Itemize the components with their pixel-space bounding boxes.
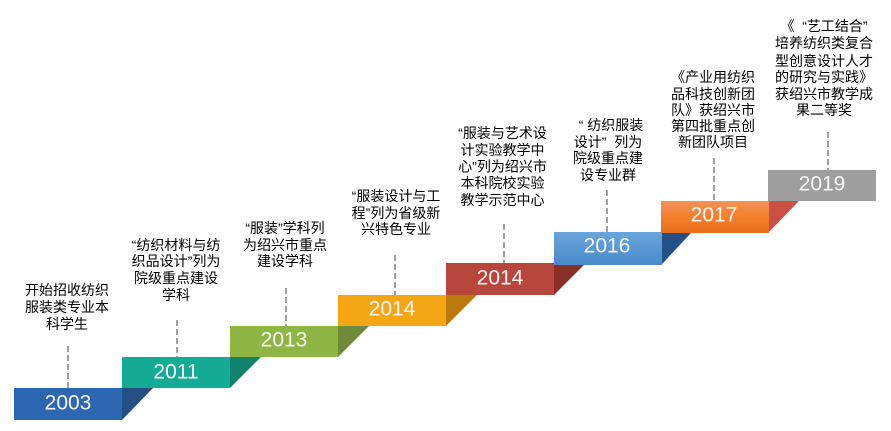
2003 connector: [67, 346, 69, 388]
2014 red description: 计实验教学中: [460, 142, 544, 158]
2013 bar: [230, 326, 338, 357]
2016 year: 2016: [584, 234, 630, 258]
2016 description: “ 纺织服装: [579, 117, 643, 133]
2011 description: 织品设计”列为: [132, 253, 220, 269]
2017 connector: [713, 158, 715, 201]
step: 2014 red: [446, 125, 585, 295]
2011 bar: [122, 357, 230, 388]
step: 2013: [230, 220, 369, 357]
2017 description: 新团队项目: [678, 134, 748, 150]
2013 fold: [338, 326, 369, 357]
2016 bar: [554, 232, 662, 265]
2014 orange year: 2014: [369, 298, 416, 320]
2013 connector: [285, 288, 287, 326]
2016 fold: [662, 233, 691, 264]
2011 description: “纺织材料与纺: [132, 237, 220, 253]
2011 connector: [176, 320, 178, 357]
2003 description: 科学生: [46, 316, 88, 332]
2014 red description: “服装与艺术设: [458, 125, 547, 141]
2016 description: 设计” 列为: [574, 134, 642, 150]
2014 orange connector: [394, 255, 396, 295]
2014 orange bar: [338, 295, 446, 326]
2013 description: “服装”学科列: [245, 220, 325, 236]
2019 description: 获绍兴市教学成: [775, 86, 873, 102]
2019 description: 果二等奖: [796, 102, 852, 118]
2019 year: 2019: [799, 172, 845, 196]
2017 description: 品科技创新团: [671, 86, 755, 102]
2019 connector: [827, 132, 829, 170]
2003 bar: [14, 388, 122, 420]
2017 description: 《产业用纺织: [671, 69, 755, 85]
2019 description: 《 “艺工结合”: [780, 18, 868, 34]
2014 red description: 本科院校实验: [460, 175, 544, 191]
2013 description: 建设学科: [257, 253, 313, 269]
2016 description: 设专业群: [580, 167, 636, 183]
step: 2016: [554, 117, 691, 265]
2017 description: 第四批重点创: [671, 118, 755, 134]
step: 2017: [661, 69, 799, 233]
2017 fold: [769, 201, 799, 232]
2011 fold: [230, 357, 261, 388]
2014 red fold: [554, 264, 585, 295]
2014 red connector: [503, 224, 505, 263]
step: 2011: [122, 237, 261, 388]
step: 2003: [14, 282, 153, 420]
2016 connector: [606, 190, 608, 232]
2013 year: 2013: [261, 328, 307, 352]
2003 description: 服装类专业本: [25, 299, 109, 315]
2011 description: 院级重点建设: [134, 270, 218, 286]
2014 orange description: “服装设计与工: [352, 188, 440, 204]
2003 year: 2003: [45, 392, 91, 414]
2019 description: 的研究与实践》: [775, 69, 873, 85]
2014 red bar: [446, 263, 554, 295]
2014 orange description: 兴特色专业: [361, 221, 431, 237]
2003 fold: [122, 388, 153, 420]
2014 orange fold: [446, 295, 477, 326]
2017 year: 2017: [691, 204, 737, 226]
step: 2019: [768, 18, 876, 201]
2014 red year: 2014: [477, 266, 524, 290]
2014 orange description: 程”列为省级新: [352, 205, 440, 221]
2014 red description: 教学示范中心: [460, 192, 544, 208]
2013 description: 为绍兴市重点: [243, 237, 327, 253]
2011 description: 学科: [162, 287, 190, 303]
2017 bar: [661, 201, 769, 233]
2003 description: 开始招收纺织: [25, 282, 109, 298]
2019 bar: [768, 170, 876, 201]
2019 description: 培养纺织类复合: [775, 35, 873, 51]
2011 year: 2011: [153, 360, 199, 384]
2019 description: 型创意设计人才: [775, 53, 873, 69]
step: 2014 orange: [338, 188, 477, 326]
2014 red description: 心”列为绍兴市: [458, 158, 547, 174]
2016 description: 院级重点建: [573, 150, 643, 166]
2017 description: 队》获绍兴市: [671, 102, 755, 118]
